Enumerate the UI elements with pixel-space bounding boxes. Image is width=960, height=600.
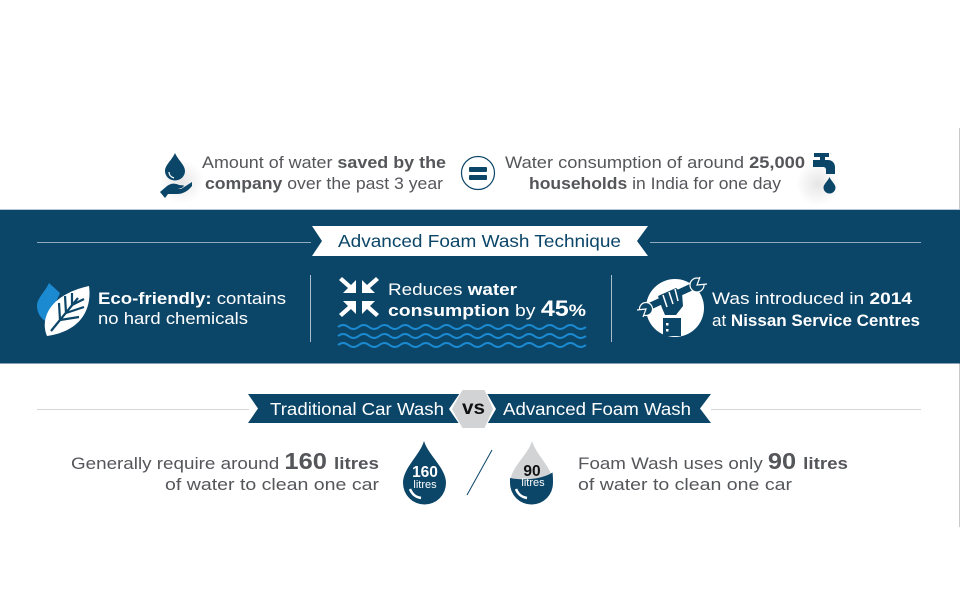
icon: leaf [37,283,90,336]
text: introduced: at Nissan Service Centres [712,311,920,330]
icon: equals sign [462,156,494,190]
comparison ribbon [248,390,711,428]
text: reduces water consumption: consumption by 45% [388,296,586,321]
text: water saved: company over the past 3 year [205,174,443,193]
text: foam wash litres: of water to clean one car [578,475,792,494]
icon: 90 litres drop: 90 [523,463,541,480]
icon: 90 litres drop: litres [521,477,545,489]
text: household consumption [505,153,805,193]
text: introduced: Was introduced in 2014 [712,289,913,308]
comparison ribbon: vs [462,398,485,419]
text: eco-friendly [98,289,286,328]
heading ribbon: Advanced Foam Wash Technique [338,231,621,251]
icon: 160 litres drop: 160 [412,464,438,481]
text: reduces water consumption: Reduces water [388,280,517,299]
text: traditional wash litres: Generally require around 160 litres [71,448,379,474]
panel: advanced foam wash technique [0,209,960,364]
text: water saved [202,153,446,193]
text: eco-friendly: Eco-friendly: contains [98,289,286,308]
text: traditional wash litres: of water to clean one car [165,475,379,494]
text: water saved: Amount of water saved by the [202,153,446,172]
text: household consumption: households in India for one day [529,174,782,193]
text: household consumption: Water consumption of around 25,000 [505,153,805,172]
icon: compress arrows [339,277,379,317]
text: traditional wash litres [71,448,379,494]
text: eco-friendly: no hard chemicals [98,309,248,328]
icon: 160 litres drop: litres [413,479,437,491]
icon: 160 litres drop [403,441,446,504]
icon: water drop in hand [160,153,204,204]
icon: water tap [796,153,840,206]
icon: hand holding wrench [637,277,707,337]
icon: 90 litres drop [510,441,553,504]
text: reduces water consumption [388,280,586,321]
icon: waves [338,325,586,347]
comparison ribbon: Traditional Car Wash [270,399,444,419]
divider slash [467,450,492,495]
comparison ribbon: Advanced Foam Wash [503,399,691,419]
heading ribbon [312,226,648,256]
text: foam wash litres: Foam Wash uses only 90 litres [578,448,848,474]
text: introduced [712,289,920,330]
text: foam wash litres [578,448,848,494]
